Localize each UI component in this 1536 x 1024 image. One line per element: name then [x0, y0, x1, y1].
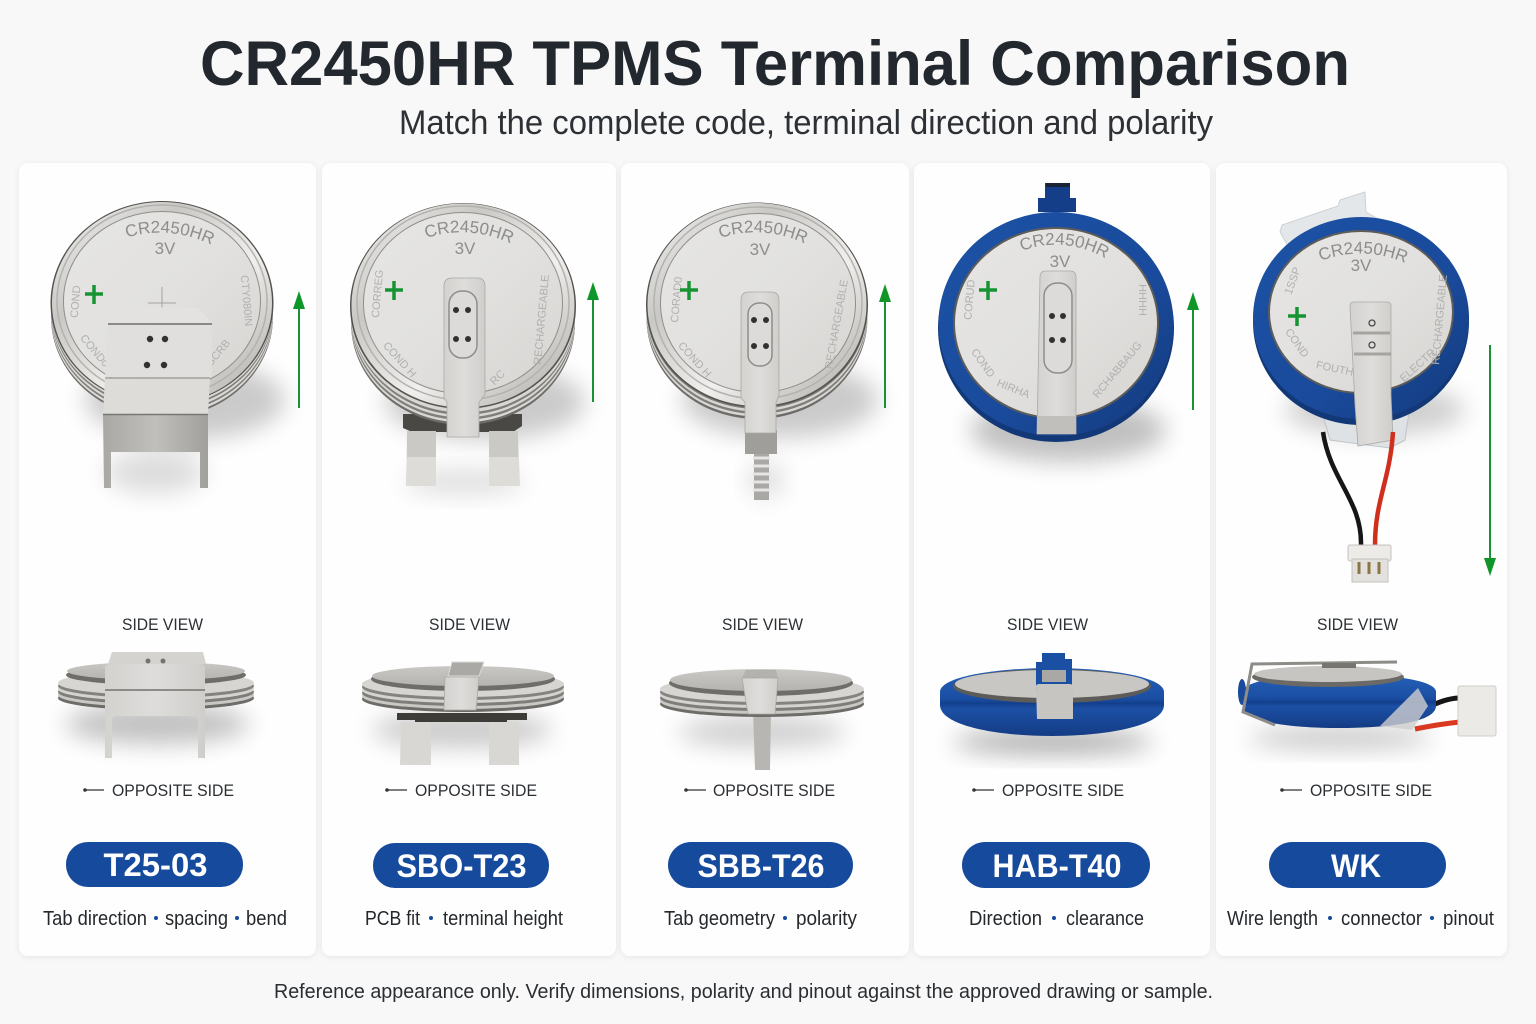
side view label: SIDE VIEW: [429, 615, 510, 634]
caption: [664, 908, 857, 930]
side view: SBB-T26: [660, 669, 864, 770]
side view label: SIDE VIEW: [1007, 615, 1088, 634]
caption: [365, 908, 563, 930]
code pill: T25-03: T25-03: [104, 847, 208, 883]
battery top view: WK: COND: [1282, 327, 1311, 360]
panel: SBO-T23: [322, 172, 616, 958]
direction arrow up: [587, 282, 599, 402]
battery top view: T25-03: COND0: [77, 332, 111, 370]
battery top view: HAB-T40: CORUD: [962, 279, 978, 320]
code pill: T25-03: [66, 842, 243, 887]
side view label: SIDE VIEW: [122, 615, 203, 634]
caption: Tab direction: [43, 908, 147, 930]
battery top view: SBB-T26: CR2450HR: [719, 220, 808, 244]
battery top view: T25-03: COND: [69, 285, 83, 318]
code pill: SBB-T26: [668, 842, 853, 888]
caption: bend: [246, 908, 287, 930]
battery top view: T25-03: 3V: [155, 239, 176, 258]
battery top view: HAB-T40: COND: [968, 347, 997, 380]
side view: HAB-T40: [940, 653, 1164, 754]
side view: T25-03: [58, 652, 254, 758]
code pill: WK: [1269, 842, 1446, 888]
battery top view: SBB-T26: COND H: [675, 340, 713, 380]
battery top view: SBB-T26: 3V: [750, 240, 771, 259]
battery top view: SBB-T26: CORAD0: [669, 276, 685, 323]
battery top view: SBO-T23: 3V: [455, 239, 476, 258]
caption: Wire length: [1227, 908, 1318, 930]
side view: SBO-T23: [362, 662, 564, 765]
caption: [969, 908, 1144, 930]
code pill: SBO-T23: [373, 843, 549, 888]
direction arrow up: [879, 284, 891, 408]
opposite side label: OPPOSITE SIDE: [1002, 781, 1124, 800]
direction arrow up: [293, 291, 305, 408]
battery top view: SBB-T26: [646, 202, 884, 501]
opposite side label: OPPOSITE SIDE: [713, 781, 835, 800]
battery top view: T25-03: SCRB: [204, 338, 233, 369]
battery top view: HAB-T40: RCHABBAUG: [1091, 340, 1145, 401]
battery top view: T25-03: [50, 201, 292, 501]
side view: WK: [1238, 662, 1496, 749]
battery top view: HAB-T40: HHHH: [1136, 284, 1148, 316]
code pill: HAB-T40: HAB-T40: [992, 848, 1122, 884]
direction arrow up: [1187, 292, 1199, 410]
clear tape: [1280, 192, 1450, 448]
battery top view: SBO-T23: CORREG: [370, 269, 386, 318]
battery top view: SBO-T23: RECHARGEABLE: [532, 274, 552, 365]
opposite side label: OPPOSITE SIDE: [1310, 781, 1432, 800]
battery top view: WK: FOUTH: [1315, 359, 1354, 379]
code pill: SBB-T26: SBB-T26: [698, 848, 824, 884]
battery top view: HAB-T40: HIRHA: [995, 377, 1032, 401]
caption: clearance: [1066, 908, 1144, 930]
caption: terminal height: [443, 908, 563, 930]
direction arrow down: [1484, 345, 1496, 576]
caption: polarity: [796, 908, 857, 930]
battery top view: WK: [1253, 192, 1470, 582]
battery top view: WK: 1SSP: [1283, 266, 1304, 296]
panel: SBB-T26: [620, 172, 910, 958]
battery top view: SBO-T23: CR2450HR: [425, 220, 514, 244]
wires and connector: [1323, 432, 1393, 582]
caption: PCB fit: [365, 908, 420, 930]
battery top view: SBB-T26: RECHARGEABLE: [823, 279, 851, 370]
battery top view: WK: RECHARGEABLE: [1430, 274, 1450, 365]
panel: WK: [1216, 172, 1508, 958]
footer note: Reference appearance only. Verify dimensions, polarity and pinout against the approved drawing or sample.: [274, 981, 1213, 1003]
caption: connector: [1341, 908, 1422, 930]
caption: [1227, 908, 1494, 930]
caption: Direction: [969, 908, 1042, 930]
code pill: SBO-T23: SBO-T23: [396, 848, 526, 884]
opposite side label: OPPOSITE SIDE: [112, 781, 234, 800]
battery top view: WK: 3V: [1351, 256, 1372, 275]
subtitle: Match the complete code, terminal direction and polarity: [399, 104, 1213, 142]
caption: Tab geometry: [664, 908, 775, 930]
battery top view: HAB-T40: 3V: [1050, 252, 1071, 271]
side view label: SIDE VIEW: [722, 615, 803, 634]
battery top view: WK: ELECTR: [1398, 347, 1438, 385]
title: CR2450HR TPMS Terminal Comparison: [200, 29, 1350, 99]
battery top view: HAB-T40: CR2450HR: [1020, 233, 1109, 258]
battery top view: SBO-T23: COND H: [380, 340, 418, 380]
battery top view: T25-03: CR2450HR: [126, 220, 214, 244]
panel: T25-03: [18, 172, 316, 958]
battery top view: SBO-T23: RC: [488, 368, 508, 388]
caption: [43, 908, 287, 930]
battery top view: WK: CR2450HR: [1319, 242, 1408, 262]
opposite side label: OPPOSITE SIDE: [415, 781, 537, 800]
code pill: HAB-T40: [962, 842, 1150, 888]
battery top view: T25-03: CTY080IN: [238, 275, 254, 327]
side view label: SIDE VIEW: [1317, 615, 1398, 634]
code pill: WK: WK: [1331, 848, 1381, 884]
caption: spacing: [165, 908, 228, 930]
panel: HAB-T40: [914, 172, 1210, 958]
battery top view: SBO-T23: [350, 203, 592, 501]
caption: pinout: [1443, 908, 1494, 930]
battery top view: HAB-T40: [938, 183, 1174, 474]
